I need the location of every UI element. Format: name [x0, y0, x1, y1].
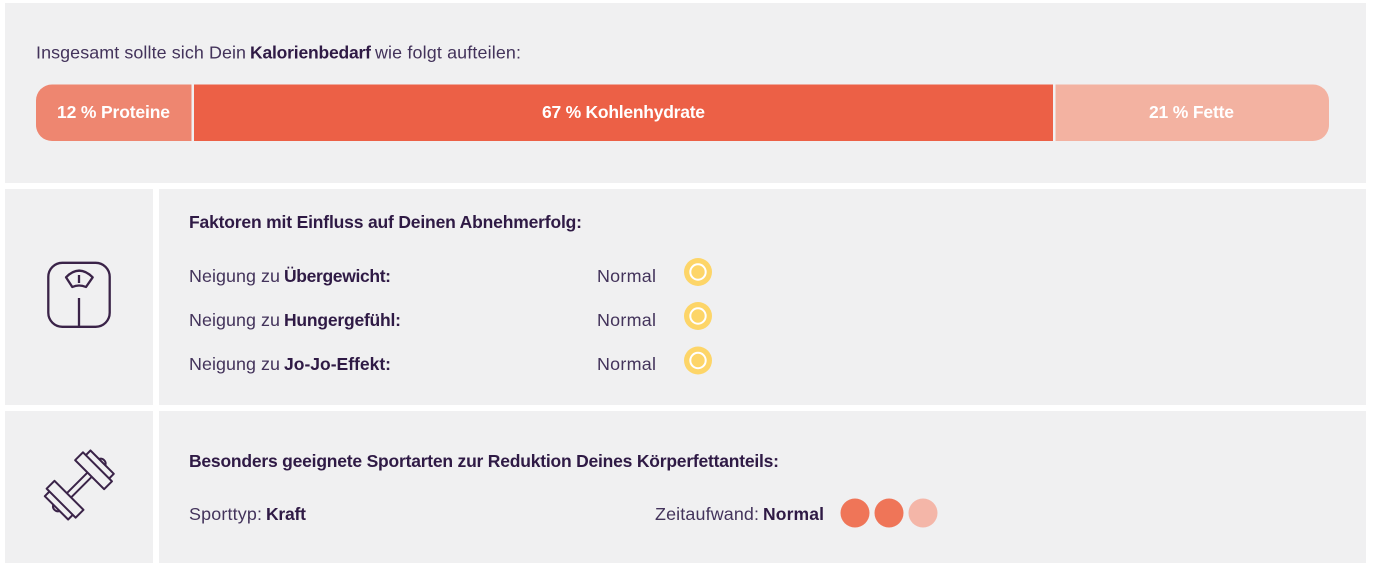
row: yo-yo tendency: Neigung zu [189, 354, 280, 374]
row: hunger tendency: Neigung zu [189, 310, 280, 330]
row: overweight tendency: Übergewicht: [284, 266, 391, 286]
heading: factors: Faktoren mit Einfluss auf Deinen Abnehmerfolg: [189, 212, 582, 232]
icon: dumbbell [40, 446, 119, 524]
panel: factors [159, 189, 1366, 405]
row: hunger tendency [189, 302, 712, 330]
stacked bar: macronutrients [36, 84, 1329, 141]
row: overweight tendency: Neigung zu [189, 266, 280, 286]
panel: calorie distribution [5, 3, 1366, 183]
row: overweight tendency [189, 258, 712, 286]
row: yo-yo tendency [189, 346, 712, 374]
bar segment: fats [1056, 84, 1329, 141]
rating dots [840, 498, 938, 528]
bar segment: carbohydrates [194, 84, 1053, 141]
time effort: Normal [763, 504, 824, 524]
row: yo-yo tendency: Normal [597, 354, 656, 374]
sport type: Sporttyp: [189, 504, 262, 524]
panel: scale icon tile [5, 189, 153, 405]
bar segment: proteins [36, 84, 192, 141]
bar segment: proteins: 12 % Proteine [57, 102, 170, 122]
heading: sports: Besonders geeignete Sportarten zur Reduktion Deines Körperfettanteils: [189, 451, 779, 471]
row: hunger tendency: Hungergefühl: [284, 310, 401, 330]
panel: sports [159, 411, 1366, 563]
time effort: Zeitaufwand: [655, 504, 759, 524]
panel: dumbbell icon tile [5, 411, 153, 563]
row: yo-yo tendency: Jo-Jo-Effekt: [284, 354, 391, 374]
time effort [655, 504, 824, 524]
row: overweight tendency: Normal [597, 266, 656, 286]
intro text [36, 42, 521, 62]
sport type [189, 504, 306, 524]
intro text: wie folgt aufteilen: [374, 42, 521, 62]
sport type: Kraft [266, 504, 306, 524]
intro text: Insgesamt sollte sich Dein [36, 42, 246, 62]
intro text: Kalorienbedarf [250, 42, 371, 62]
row: hunger tendency: Normal [597, 310, 656, 330]
bar segment: fats: 21 % Fette [1149, 102, 1234, 122]
icon: scale [48, 263, 110, 327]
bar segment: carbohydrates: 67 % Kohlenhydrate [542, 102, 705, 122]
